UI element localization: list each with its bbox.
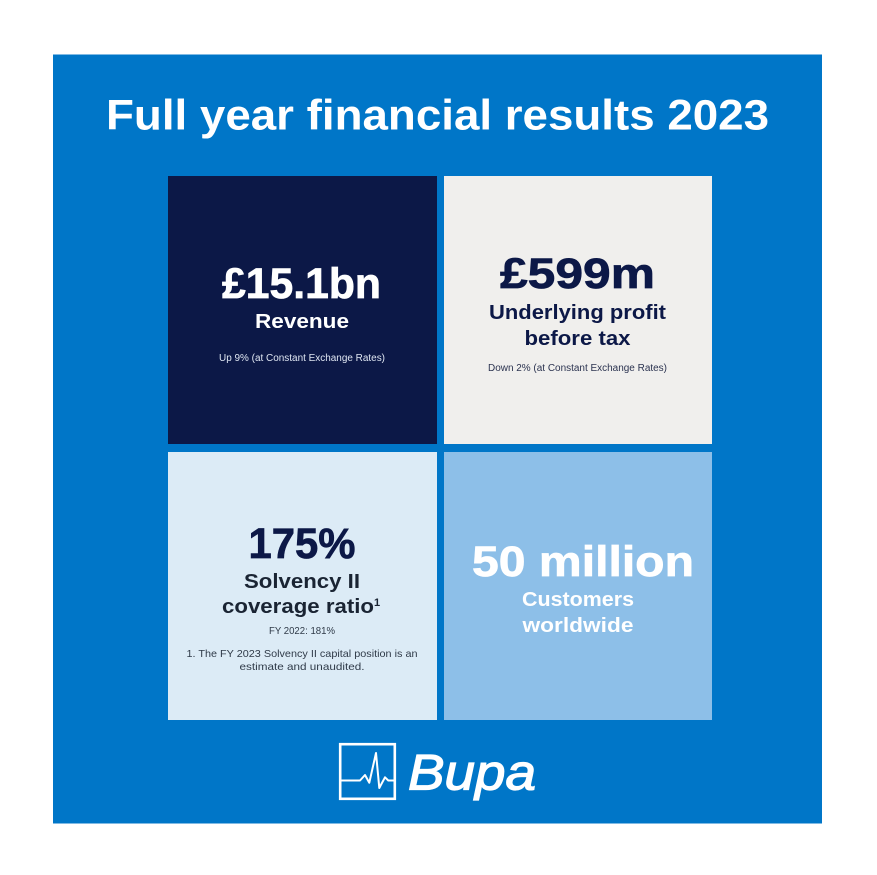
panel: underlying profit xyxy=(444,176,712,444)
footnote marker: 1 xyxy=(374,597,380,609)
blue background panel xyxy=(53,54,822,824)
panel: solvency: estimate and unaudited. xyxy=(240,661,364,673)
title: Full year financial results 2023 xyxy=(106,92,769,140)
panel: customers xyxy=(444,452,712,720)
panel: solvency: coverage ratio xyxy=(222,596,374,618)
panel: underlying profit: before tax xyxy=(524,328,630,350)
customers figure: 50 million xyxy=(472,538,694,586)
revenue label: Revenue xyxy=(255,311,349,333)
Bupa logo xyxy=(340,744,536,800)
solvency label: Solvency II xyxy=(244,571,360,593)
profit figure: £599m xyxy=(500,250,655,298)
panel: revenue xyxy=(168,176,437,444)
profit label: Underlying profit xyxy=(489,302,666,324)
customers label: Customers xyxy=(522,589,634,611)
solvency comparison: FY 2022: 181% xyxy=(269,625,335,637)
wordmark: Bupa xyxy=(408,744,536,800)
revenue figure: £15.1bn xyxy=(222,260,381,308)
icon: heartbeat box xyxy=(340,744,395,799)
footnote: 1. The FY 2023 Solvency II capital position is an xyxy=(186,648,418,660)
revenue note: Up 9% (at Constant Exchange Rates) xyxy=(219,353,385,364)
profit note: Down 2% (at Constant Exchange Rates) xyxy=(488,363,667,374)
solvency figure: 175% xyxy=(248,520,356,568)
panel: solvency xyxy=(168,452,437,720)
panel: customers: worldwide xyxy=(521,615,634,637)
